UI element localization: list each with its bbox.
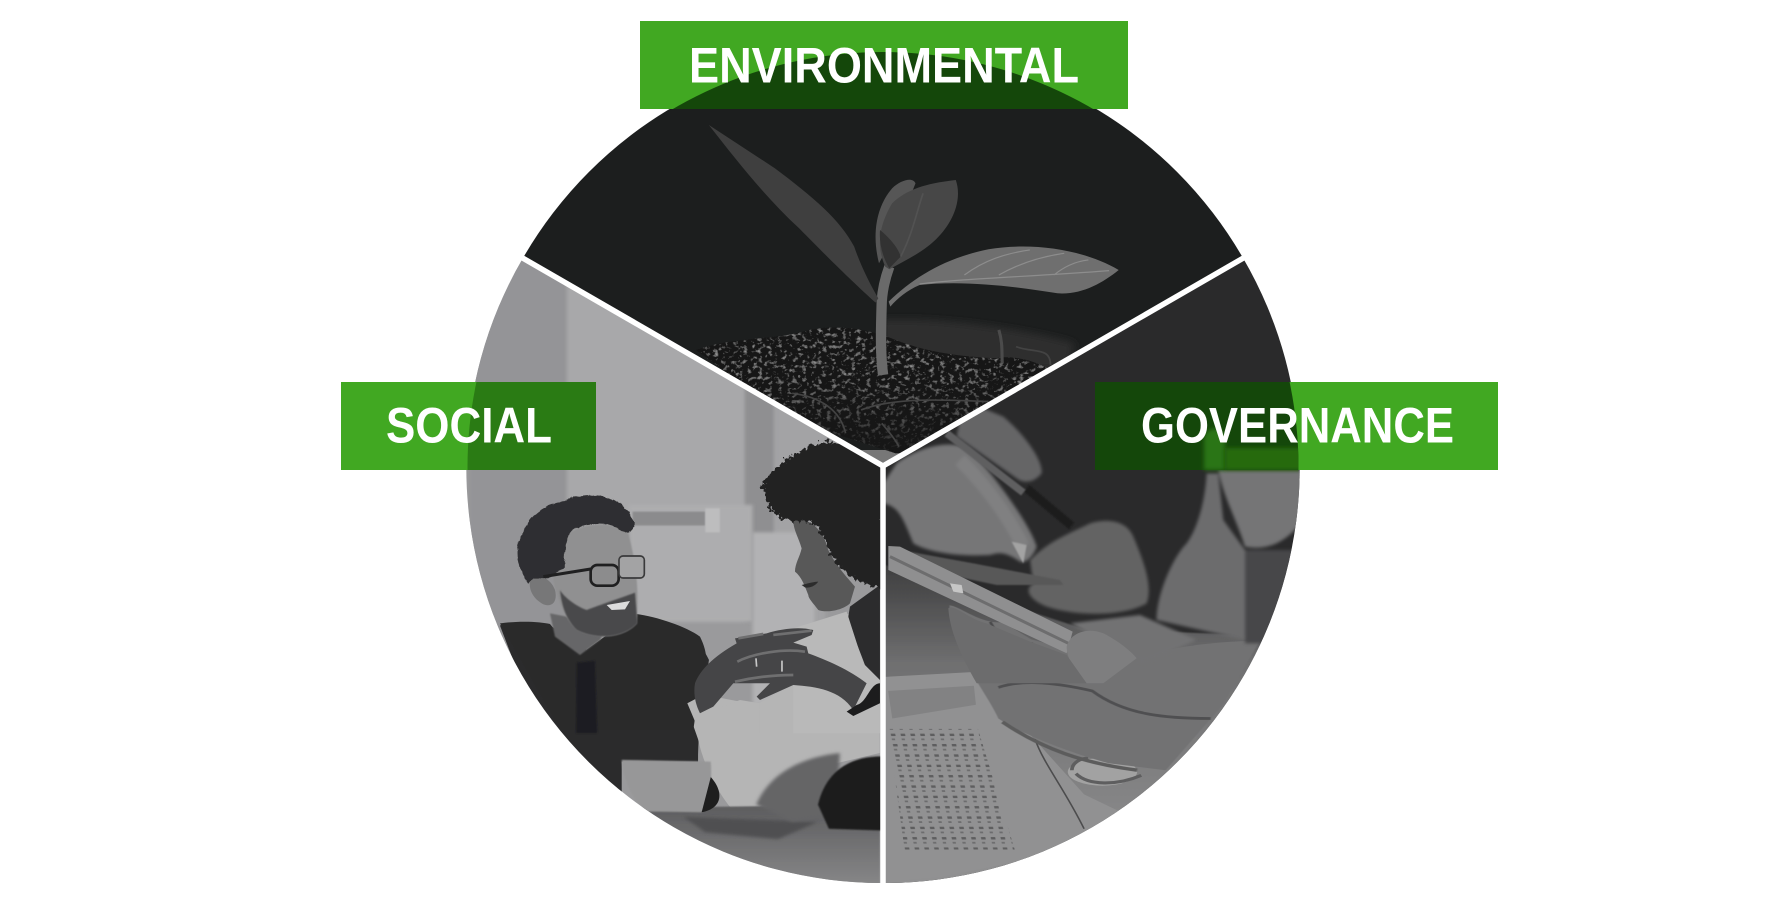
clasped hands	[694, 628, 867, 713]
holding hand	[949, 605, 1260, 770]
seedling stem	[881, 267, 889, 375]
panel: governance photo wedge	[886, 260, 1300, 883]
soil background haze	[882, 319, 1075, 370]
label: governance	[1095, 382, 1498, 470]
fingers	[948, 607, 1087, 683]
label: social	[341, 382, 596, 470]
divider lines between wedges	[520, 256, 1246, 890]
second hand	[1029, 521, 1149, 614]
ESG pie diagram	[341, 21, 1498, 883]
watch	[847, 683, 880, 716]
coffee cup	[622, 760, 711, 812]
thumb	[1067, 631, 1137, 683]
tablet	[888, 546, 1073, 653]
people in conversation	[500, 439, 883, 733]
panel: social photo wedge	[466, 260, 880, 883]
card	[900, 550, 1063, 585]
label: governance: GOVERNANCE	[1141, 398, 1454, 454]
soil shadow fade	[766, 380, 1006, 454]
man shirt lower part	[500, 615, 709, 794]
pen	[947, 433, 1072, 526]
panel: environmental photo wedge	[524, 109, 1242, 463]
label: environmental: ENVIRONMENTAL	[689, 38, 1079, 94]
paper sheet with data table	[886, 672, 1142, 862]
office background	[469, 222, 882, 898]
man	[500, 494, 706, 733]
table	[643, 806, 880, 883]
woman	[687, 439, 883, 733]
soil mound	[696, 327, 1050, 453]
woman blazer lower part	[687, 613, 880, 818]
soil roots	[792, 330, 1050, 447]
foreground hand and sleeve	[754, 752, 842, 806]
blurred hands, pen and tablet	[883, 400, 1303, 683]
right background objects	[1070, 470, 1303, 663]
front leaf	[880, 180, 958, 269]
label: environmental	[640, 21, 1128, 109]
long left leaf	[709, 125, 878, 303]
back leaf	[876, 180, 915, 263]
right leaf	[889, 246, 1119, 307]
label: social: SOCIAL	[386, 398, 552, 454]
writing hand	[883, 400, 1042, 562]
lower background and table	[880, 563, 1272, 898]
